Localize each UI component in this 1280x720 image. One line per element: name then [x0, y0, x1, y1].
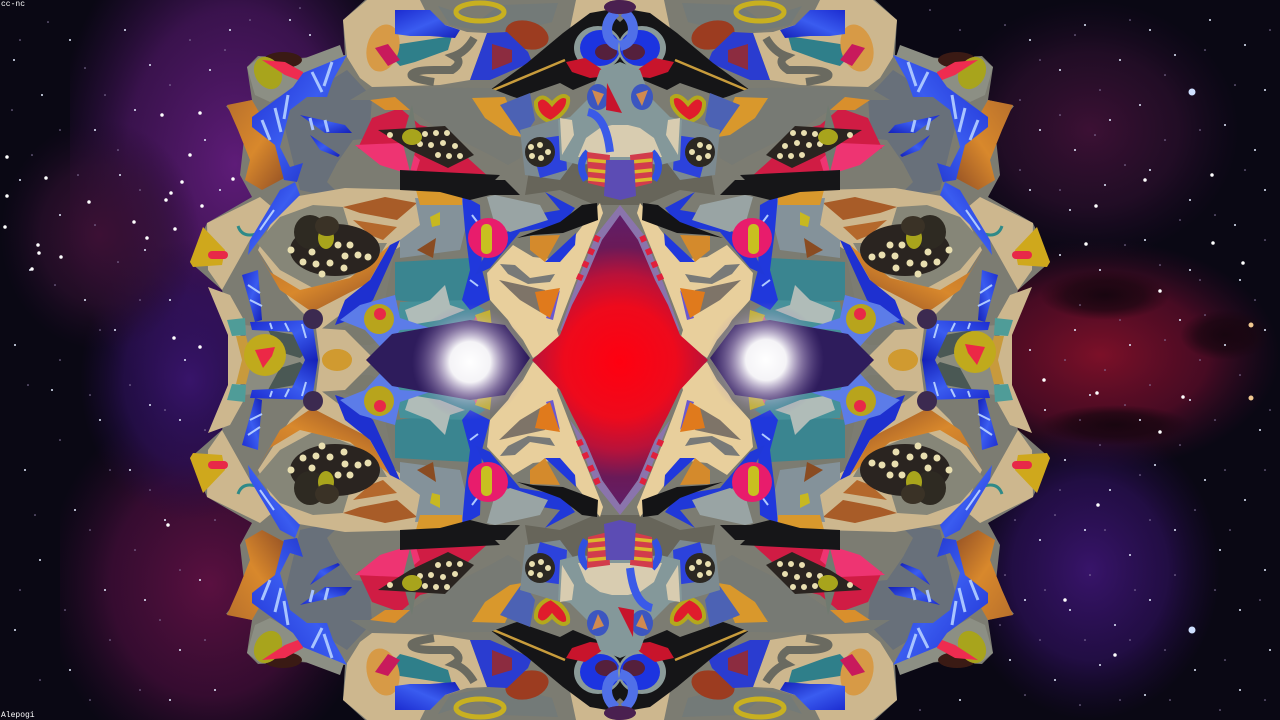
left white orb — [412, 304, 528, 420]
right white orb — [708, 302, 824, 418]
left orb backdrop — [366, 320, 530, 400]
right orb backdrop — [710, 320, 874, 400]
central lavender edge lower — [570, 420, 670, 515]
kaleidoscope collage — [190, 0, 1050, 720]
top figure red triangle — [606, 83, 622, 113]
quadrant: top left — [190, 0, 636, 371]
quadrant: bottom left — [190, 349, 636, 720]
diamond red beads — [576, 236, 664, 484]
quadrant: bottom right — [604, 349, 1050, 720]
central red diamond — [532, 215, 708, 505]
quadrant: top right — [604, 0, 1050, 371]
bottom figure red triangle — [618, 607, 634, 637]
bottom figure blue ribbon — [630, 568, 652, 608]
author label: Alepogi — [1, 711, 35, 720]
left gem — [244, 334, 286, 376]
licence label: cc-nc — [1, 0, 25, 9]
central diamond lavender edge — [560, 205, 680, 350]
top figure blue ribbon — [588, 112, 610, 152]
right gem — [954, 331, 996, 373]
